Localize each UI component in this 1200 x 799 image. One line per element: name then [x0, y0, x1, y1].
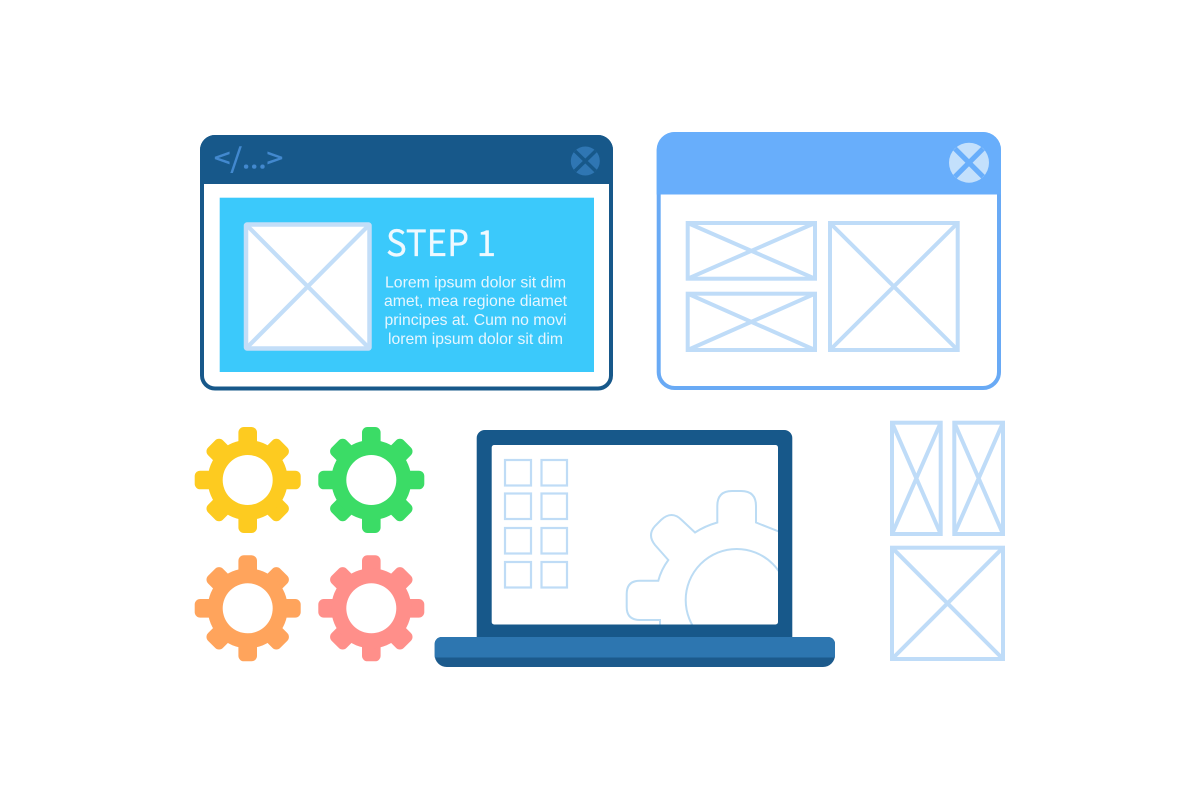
- icon: yellow gear: [195, 427, 301, 533]
- icon: close button: [949, 143, 989, 183]
- wireframe placeholders stack: [892, 423, 1003, 659]
- infographic canvas: [194, 132, 1005, 667]
- laptop lid: [477, 430, 792, 638]
- laptop screen: [492, 445, 778, 624]
- window frame: [659, 134, 999, 388]
- body text: Lorem ipsum dolor sit dim: [385, 274, 566, 292]
- placeholder: square: [892, 548, 1003, 659]
- placeholder: tall left: [892, 423, 941, 534]
- image placeholder: [246, 224, 370, 348]
- wireframe image placeholders: [688, 223, 958, 350]
- window title bar: [657, 132, 1001, 194]
- icon: green gear: [318, 427, 424, 533]
- icon: close button: [571, 146, 600, 176]
- content banner: [220, 198, 594, 372]
- step heading: STEP 1: [386, 215, 496, 267]
- placeholder: top left: [688, 223, 815, 279]
- app icon grid: [505, 460, 567, 588]
- body text: amet, mea regione diamet: [384, 293, 568, 310]
- laptop base: [435, 637, 835, 667]
- window title bar: [200, 135, 613, 184]
- body text: [384, 274, 568, 348]
- placeholder: bottom left: [688, 294, 815, 350]
- icon: orange gear: [195, 555, 301, 661]
- window frame: [202, 137, 611, 388]
- icon: pink gear: [318, 555, 424, 661]
- code symbol: </...>: [214, 137, 283, 176]
- body text: lorem ipsum dolor sit dim: [388, 331, 563, 348]
- laptop illustration: [435, 430, 835, 667]
- placeholder: tall right: [954, 423, 1003, 534]
- large gear outline: [626, 490, 778, 624]
- body text: principes at. Cum no movi: [384, 312, 566, 329]
- panel: wireframe browser window: [657, 132, 1001, 388]
- panel: step 1 browser window: [200, 135, 613, 388]
- placeholder: right: [830, 223, 958, 350]
